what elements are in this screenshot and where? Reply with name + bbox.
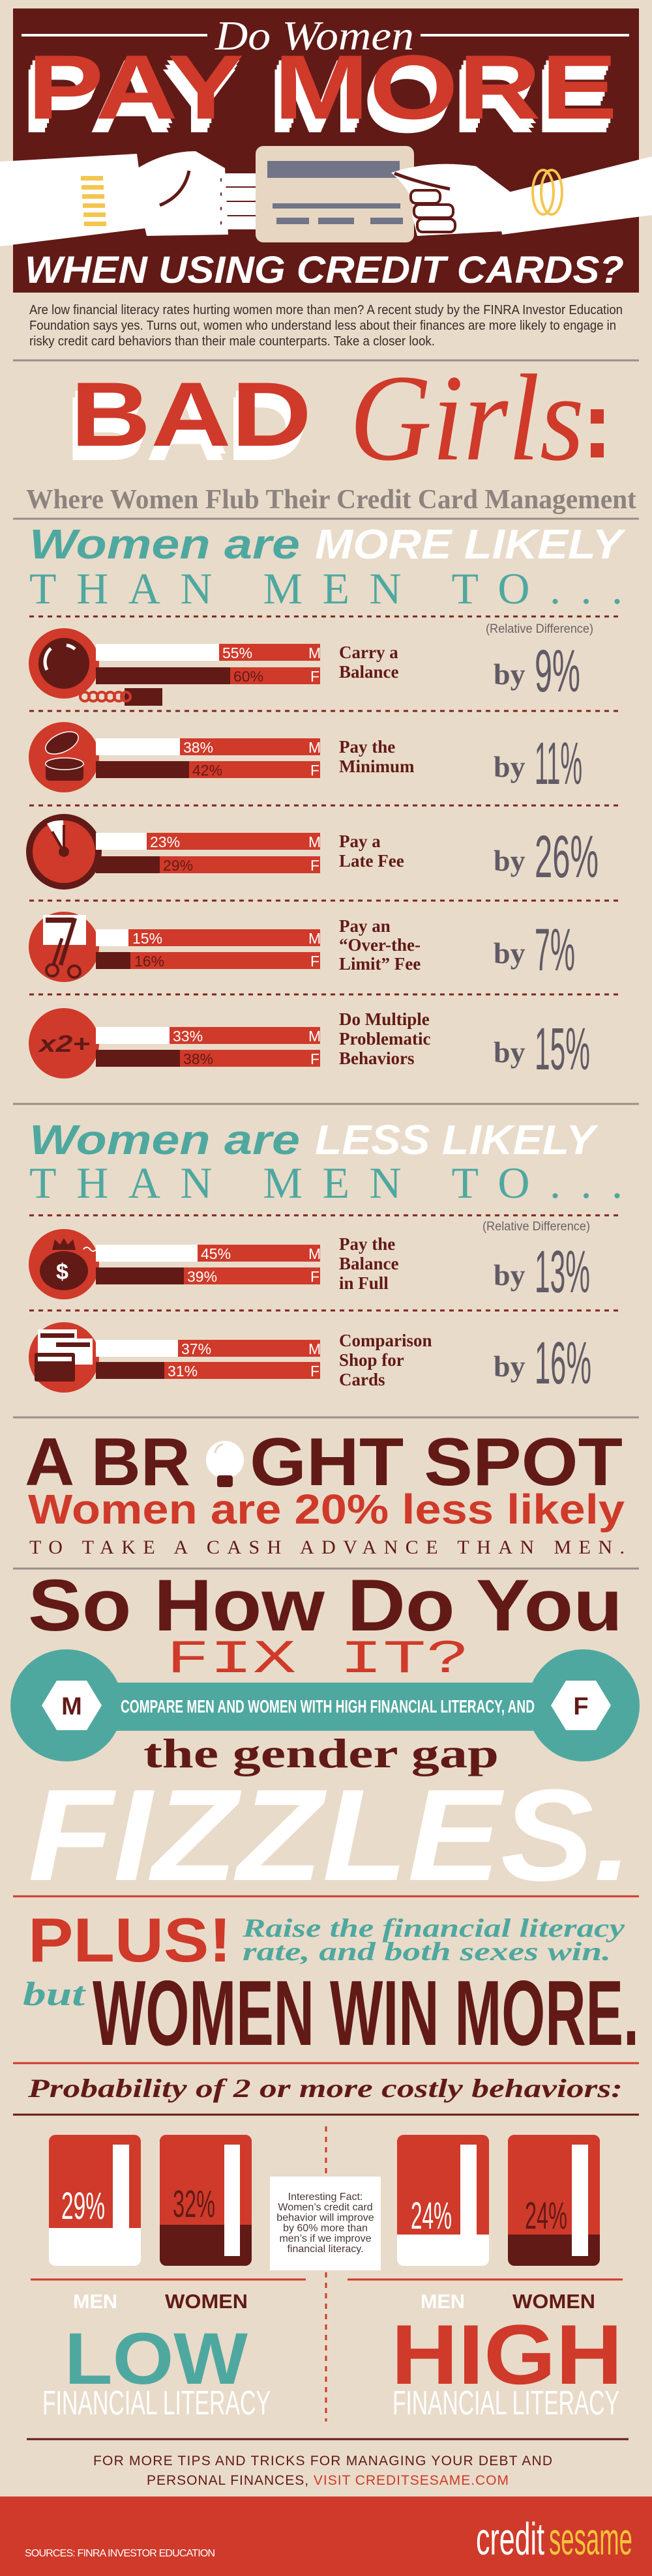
chart: high literacy women bbox=[508, 2135, 600, 2266]
chart: low literacy men: 29% bbox=[61, 2185, 105, 2227]
label: Do Multiple bbox=[339, 1009, 430, 1029]
bar chart: F bbox=[310, 1050, 319, 1067]
icon: cards bbox=[29, 1322, 99, 1393]
bar chart: M bbox=[308, 739, 321, 756]
labels: low literacy: MEN bbox=[73, 2290, 117, 2313]
bar chart: 15% bbox=[132, 930, 162, 947]
bar chart bbox=[96, 1245, 321, 1285]
footer text: PERSONAL FINANCES, VISIT CREDITSESAME.COM bbox=[147, 2473, 509, 2488]
callout: interesting fact: by 60% more than bbox=[283, 2223, 368, 2234]
labels: low literacy: FINANCIAL LITERACY bbox=[42, 2384, 271, 2422]
label: Problematic bbox=[339, 1029, 430, 1049]
stat bbox=[494, 1330, 591, 1397]
heading: So How Do You Fix It: So How Do You bbox=[28, 1565, 623, 1646]
bar chart: 33% bbox=[173, 1028, 203, 1045]
heading: A BRIGHT SPOT: GHT SPOT bbox=[250, 1425, 623, 1500]
icon: x2+: x2+ bbox=[37, 1030, 90, 1057]
label: Shop for bbox=[339, 1350, 404, 1370]
label: Minimum bbox=[339, 757, 415, 776]
heading: more likely: Women are bbox=[29, 521, 300, 568]
bar chart: 31% bbox=[168, 1363, 198, 1380]
icon: scissors cutting card bbox=[29, 912, 99, 982]
label: Cards bbox=[339, 1370, 385, 1389]
chart: low literacy women: 32% bbox=[173, 2183, 215, 2225]
callout: interesting fact: behavior will improve bbox=[276, 2212, 374, 2223]
title: PAY MORE: PAY MORE bbox=[21, 50, 611, 152]
bar chart: M bbox=[308, 1245, 321, 1262]
stat bbox=[494, 731, 582, 797]
heading: BAD Girls: BAD bbox=[70, 363, 312, 465]
intro text: risky credit card behaviors than their male counterparts. Take a closer look. bbox=[29, 334, 435, 349]
heading: probability: Probability of 2 or more costly behaviors: bbox=[27, 2074, 623, 2103]
title: PAY MORE: PAY MORE bbox=[23, 45, 613, 147]
bar chart: F bbox=[310, 668, 319, 685]
title: WHEN USING CREDIT CARDS?: WHEN USING CREDIT CARDS? bbox=[25, 249, 624, 291]
label: in Full bbox=[339, 1273, 389, 1293]
stat: by bbox=[494, 658, 526, 691]
label: Carry a bbox=[339, 643, 398, 662]
heading: less likely: Women are bbox=[29, 1116, 300, 1163]
label: Limit” Fee bbox=[339, 954, 421, 974]
heading: less likely: LESS LIKELY bbox=[315, 1116, 599, 1163]
text: 11% bbox=[535, 731, 582, 797]
text: 16% bbox=[535, 1330, 591, 1397]
bar chart: 45% bbox=[201, 1245, 231, 1262]
chart: high literacy men: 24% bbox=[411, 2195, 452, 2237]
bar chart: M bbox=[308, 1340, 321, 1357]
bar chart: 23% bbox=[150, 833, 180, 850]
heading: less likely bbox=[29, 1116, 623, 1208]
bar chart: M bbox=[308, 1028, 321, 1045]
labels: low literacy: WOMEN bbox=[165, 2290, 248, 2313]
title: PAY MORE: PAY MORE bbox=[27, 36, 617, 138]
labels: low literacy bbox=[42, 2290, 271, 2422]
bar chart: F bbox=[310, 1363, 319, 1380]
row: carry a balance bbox=[29, 628, 580, 706]
bar chart: 16% bbox=[134, 953, 164, 970]
label: Pay an bbox=[339, 916, 391, 936]
heading: BAD Girls: BAD bbox=[65, 377, 306, 480]
callout: interesting fact: financial literacy. bbox=[287, 2244, 364, 2255]
intro text: Are low financial literacy rates hurting women more than men? A recent study by the FINRA Investor Education bbox=[29, 303, 623, 317]
bar chart: 42% bbox=[192, 762, 222, 779]
bar chart bbox=[96, 1027, 321, 1067]
label: Comparison bbox=[339, 1331, 432, 1350]
icon: clock bbox=[26, 814, 102, 890]
title: PAY MORE bbox=[21, 36, 617, 152]
row: pay a late fee bbox=[26, 814, 599, 890]
text: 13% bbox=[535, 1239, 590, 1305]
icon: F hex bbox=[551, 1681, 611, 1730]
footer text: FOR MORE TIPS AND TRICKS FOR MANAGING YOUR DEBT AND bbox=[93, 2453, 552, 2468]
text: 7% bbox=[535, 917, 575, 983]
row: comparison shop bbox=[29, 1322, 591, 1397]
label: Pay the bbox=[339, 737, 395, 757]
stat: by bbox=[494, 750, 526, 783]
bar chart bbox=[96, 738, 321, 779]
PLUS block: but bbox=[23, 1976, 86, 2013]
stat bbox=[494, 824, 599, 890]
labels: high literacy: HIGH bbox=[391, 2307, 623, 2402]
bar chart: 38% bbox=[183, 739, 213, 756]
icon: light bulb bbox=[206, 1441, 244, 1487]
callout: interesting fact: Interesting Fact: bbox=[288, 2192, 363, 2203]
footer text bbox=[93, 2453, 552, 2488]
icon: M hex bbox=[42, 1681, 102, 1730]
icon: money bag bbox=[29, 1229, 99, 1299]
stat: by bbox=[494, 1035, 526, 1069]
bar chart: F bbox=[310, 857, 319, 874]
bar chart: 60% bbox=[233, 668, 263, 685]
text: 15% bbox=[535, 1016, 590, 1082]
stat: by bbox=[494, 844, 526, 877]
heading: So How Do You Fix It: FIX IT? bbox=[166, 1633, 469, 1686]
text: cash advance: TO TAKE A CASH ADVANCE THAN MEN. bbox=[29, 1537, 625, 1558]
stat bbox=[494, 638, 580, 704]
row: pay balance in full bbox=[29, 1229, 590, 1305]
sources: SOURCES: FINRA INVESTOR EDUCATION bbox=[25, 2548, 215, 2559]
PLUS block bbox=[23, 1905, 639, 2065]
bar chart: 39% bbox=[187, 1268, 217, 1285]
heading: BAD Girls bbox=[65, 350, 604, 487]
callout: interesting fact: men’s if we improve bbox=[279, 2233, 372, 2244]
bar chart: 55% bbox=[222, 644, 252, 661]
labels: high literacy: MEN bbox=[421, 2290, 465, 2313]
label: relative difference: (Relative Difference) bbox=[482, 1220, 590, 1234]
heading: more likely: MORE LIKELY bbox=[315, 521, 627, 568]
bar chart: M bbox=[308, 644, 321, 661]
label: Late Fee bbox=[339, 851, 404, 871]
label: Pay a bbox=[339, 832, 381, 851]
bar chart: 37% bbox=[181, 1340, 211, 1357]
heading: A BRIGHT SPOT bbox=[25, 1425, 623, 1500]
row: multiple problematic behaviors bbox=[29, 1008, 590, 1082]
chart: high literacy women: 24% bbox=[525, 2195, 567, 2237]
stat bbox=[494, 1239, 590, 1305]
heading: BAD Girls: BAD bbox=[68, 371, 309, 473]
label: Balance bbox=[339, 1254, 399, 1273]
label: Pay the bbox=[339, 1234, 395, 1254]
bar chart: 38% bbox=[183, 1050, 213, 1067]
illustration: hands passing credit card bbox=[0, 146, 652, 246]
bar chart bbox=[96, 1340, 321, 1380]
icon: ball and chain bbox=[29, 628, 162, 706]
header panel bbox=[0, 8, 652, 293]
subtitle: Where Women Flub Their Credit Card Management bbox=[26, 485, 636, 515]
icon: money bag: $ bbox=[56, 1260, 68, 1284]
bar chart bbox=[96, 644, 321, 685]
label: Balance bbox=[339, 662, 399, 682]
stat bbox=[494, 917, 575, 983]
heading: A BRIGHT SPOT: A BR bbox=[25, 1425, 190, 1500]
logo: credit sesame: credit bbox=[476, 2513, 544, 2564]
callout: interesting fact bbox=[270, 2177, 381, 2270]
chart: high literacy men bbox=[397, 2135, 489, 2266]
bar chart: F bbox=[310, 953, 319, 970]
heading: BAD Girls: Girls bbox=[349, 350, 584, 487]
heading: less likely: THAN MEN TO... bbox=[29, 1158, 623, 1208]
text: FIZZLES: FIZZLES. bbox=[28, 1763, 632, 1908]
stat: 26% bbox=[535, 824, 599, 890]
icon: F hex: F bbox=[573, 1693, 589, 1720]
row: over the limit fee bbox=[29, 912, 575, 983]
chart: low literacy women bbox=[160, 2135, 252, 2266]
bar chart: F bbox=[310, 762, 319, 779]
heading: So How Do You Fix It bbox=[28, 1565, 623, 1686]
text: the gender gap: the gender gap bbox=[143, 1730, 499, 1776]
bar chart bbox=[96, 929, 321, 970]
labels: high literacy: WOMEN bbox=[512, 2290, 595, 2313]
title: PAY MORE: PAY MORE bbox=[25, 40, 615, 143]
stat: by bbox=[494, 1350, 526, 1383]
stat: by bbox=[494, 936, 526, 970]
text: 20% less likely: Women are 20% less likely bbox=[28, 1486, 625, 1533]
PLUS block: rate, and both sexes win. bbox=[243, 1937, 611, 1966]
bar chart: 29% bbox=[163, 857, 193, 874]
PLUS block: Raise the financial literacy bbox=[242, 1913, 625, 1943]
footer band bbox=[0, 2496, 652, 2576]
labels: low literacy: LOW bbox=[65, 2318, 248, 2399]
labels: high literacy bbox=[391, 2290, 623, 2422]
title: Do Women: Do Women bbox=[215, 12, 414, 59]
bar chart: M bbox=[308, 833, 321, 850]
intro text: Foundation says yes. Turns out, women who understand less about their finances are more likely to engage in bbox=[29, 319, 616, 333]
row: pay the minimum bbox=[29, 722, 582, 797]
chart: low literacy men bbox=[49, 2135, 141, 2266]
heading: more likely bbox=[29, 521, 627, 613]
bar chart: F bbox=[310, 1268, 319, 1285]
icon: M hex: M bbox=[61, 1693, 82, 1720]
label: relative difference: (Relative Difference) bbox=[486, 622, 593, 636]
bar chart: M bbox=[308, 930, 321, 947]
bar chart bbox=[96, 833, 321, 874]
credit card bbox=[256, 146, 414, 242]
stat bbox=[494, 1016, 590, 1082]
stat: by bbox=[494, 1258, 526, 1292]
PLUS block: PLUS! bbox=[28, 1905, 231, 1975]
intro text bbox=[29, 303, 623, 349]
icon: x2+ bbox=[29, 1008, 99, 1078]
label: Behaviors bbox=[339, 1049, 415, 1068]
wrench graphic bbox=[10, 1649, 640, 1761]
callout: interesting fact: Women’s credit card bbox=[278, 2202, 373, 2213]
stat: 9% bbox=[535, 638, 580, 704]
label: “Over-the- bbox=[339, 935, 421, 955]
icon: coins bbox=[29, 722, 99, 792]
heading: more likely: THAN MEN TO... bbox=[29, 564, 623, 613]
